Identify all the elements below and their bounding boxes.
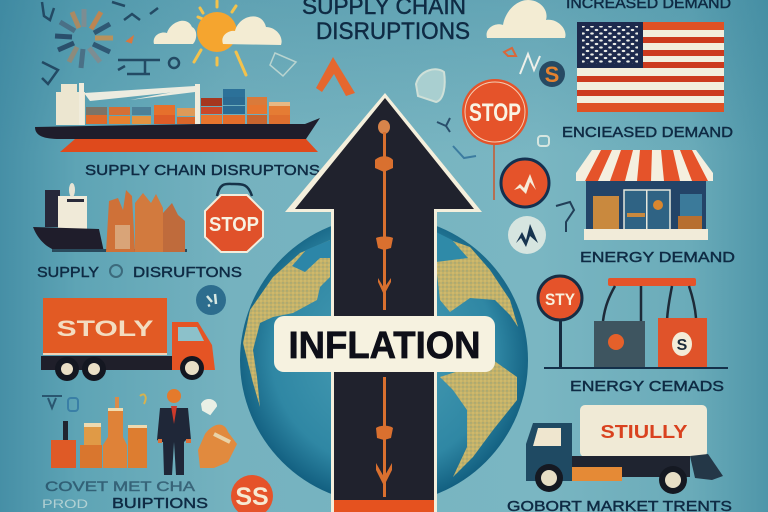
label: covet met cha: COVET MET CHA: [45, 478, 196, 494]
label: inflation: [274, 316, 495, 372]
icon: stop octagon: STOP: [209, 214, 259, 236]
heading: supply chain disruptions: DISRUPTIONS: [316, 18, 470, 45]
arrow center line: [375, 120, 393, 497]
icon: top right cloud: [487, 0, 566, 38]
icon: small doodles: [42, 394, 216, 414]
icon: radial wheel: [55, 9, 113, 68]
icon: orange sacks: [106, 190, 185, 252]
icon: orange bag: [198, 425, 237, 468]
label: energy cemads: ENERGY CEMADS: [570, 378, 724, 395]
label: supply disruftons: DISRUFTONS: [133, 264, 242, 281]
label: supply disruftons: [37, 264, 242, 281]
icon: stop octagon: [205, 184, 263, 252]
icon: delivery truck: [41, 298, 215, 381]
label: encieased demand: ENCIEASED DEMAND: [562, 124, 733, 141]
label: supply disruftons: SUPPLY: [37, 264, 99, 281]
label: supply chain disruptons: SUPPLY CHAIN DISRUPTONS: [85, 162, 320, 179]
icon: sun and clouds: [154, 1, 282, 75]
icon: orange SS badge: [231, 475, 273, 512]
icon: stop circle sign: STOP: [469, 99, 521, 127]
graphic: inflation arrow: [285, 93, 482, 512]
awning: [576, 150, 713, 181]
icon: energy bags: S: [677, 337, 688, 354]
icon: energy bags: [544, 278, 728, 369]
icon: teal dot: [196, 285, 226, 315]
label: disruptions partial: BUIPTIONS: [112, 495, 208, 512]
icon: tanker truck: [526, 405, 723, 494]
icon: top left doodles: [42, 2, 296, 84]
icon: american flag: [577, 22, 724, 112]
icon: dollar coin: [539, 61, 565, 87]
label: inflation: INFLATION: [288, 325, 480, 367]
icon: businessman: [157, 389, 191, 475]
icon: orange chevron: [316, 57, 355, 96]
icon: white badge: [508, 216, 546, 254]
icon: floating doodles: [416, 48, 574, 232]
heading: supply chain disruptions: [302, 0, 470, 45]
icon: container ship: [35, 83, 320, 152]
label: energy demand: ENERGY DEMAND: [580, 249, 735, 266]
icon: delivery truck: STOLY: [56, 316, 154, 341]
label: faded prefix: PROD: [42, 497, 88, 511]
graphic: globe: [240, 216, 528, 504]
icon: small ship: [33, 183, 187, 252]
icon: stop circle sign: [462, 79, 528, 200]
icon: orange SS badge: SS: [235, 483, 269, 511]
icon: storefront: [576, 150, 713, 240]
icon: orange navy badge: [501, 159, 549, 207]
icon: small stop sign: STY: [545, 290, 576, 309]
icon: tanker truck: STIULLY: [600, 422, 688, 442]
icon: small stop sign: [538, 276, 582, 368]
icon: dollar coin: S: [545, 62, 559, 87]
icon: bottles and jars: [51, 397, 147, 468]
